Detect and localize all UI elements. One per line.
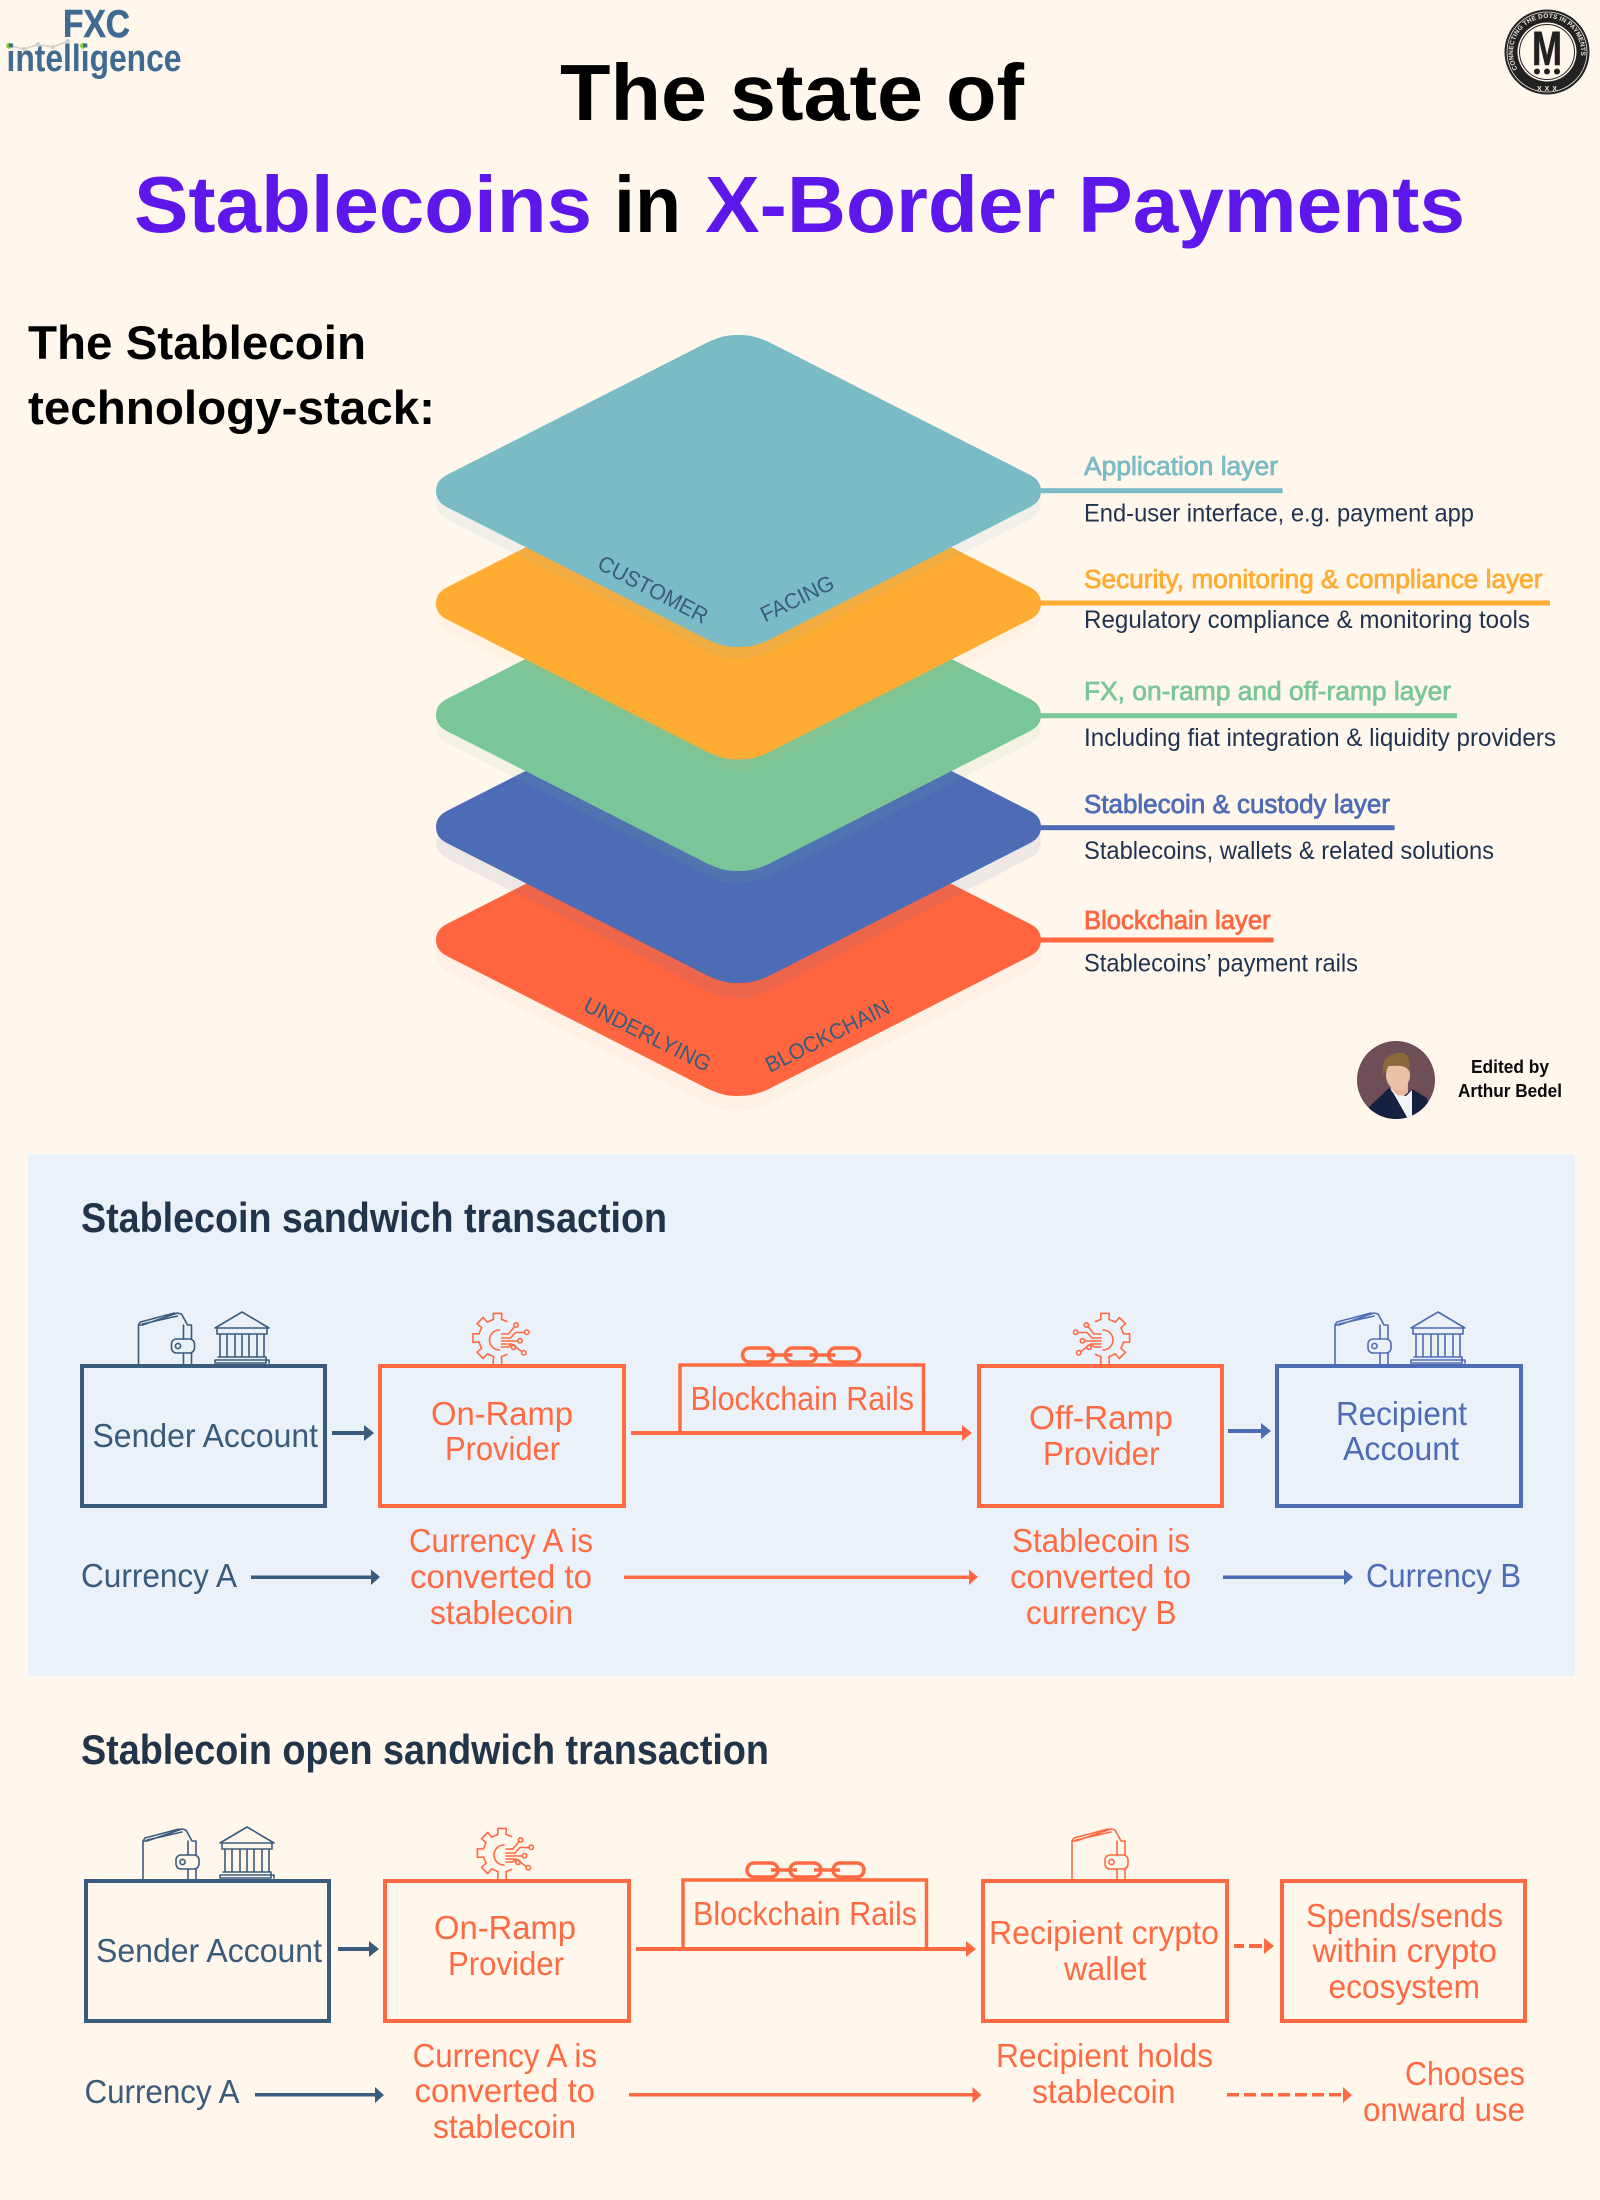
heading: The Stablecoin technology-stack: [28, 316, 435, 434]
layer: blockchain: BLOCKCHAIN: [761, 994, 894, 1077]
note: currency A is converted to stablecoin: [409, 1522, 593, 1631]
logo: FXC Intelligence: FXC: [63, 3, 130, 46]
logo: FXC Intelligence: intelligence: [6, 38, 182, 80]
badge: Connecting the dots in payments: XXX: [1537, 86, 1557, 93]
layer: security monitoring compliance: [436, 447, 1041, 772]
box: sender account: [82, 1366, 325, 1506]
box: off-ramp provider: Provider: [1043, 1435, 1160, 1472]
arrow: sender to on-ramp: [338, 1941, 379, 1957]
box: recipient crypto wallet: Recipient crypto: [989, 1914, 1219, 1951]
box: sender account: [86, 1881, 329, 2021]
title: in: [614, 160, 681, 249]
layer: blockchain: UNDERLYING: [580, 992, 715, 1077]
note: stablecoin is converted to currency B: Stablecoin is: [1012, 1522, 1190, 1559]
box: off-ramp provider: Off-Ramp: [1029, 1399, 1173, 1436]
layer: application: CUSTOMER: [594, 550, 712, 628]
arrow: sender to on-ramp: [332, 1425, 374, 1441]
arrow: currency A: [251, 1570, 380, 1585]
icon: sender bank: [215, 1312, 269, 1363]
note: currency A is converted to stablecoin: converted to: [415, 2072, 595, 2109]
layer: application: FACING: [756, 570, 838, 627]
box: blockchain rails with flow arrow: [631, 1365, 972, 1441]
layer label: stablecoin: Stablecoin & custody layer: [1084, 791, 1391, 819]
layer: FX on-ramp off-ramp: [436, 559, 1041, 883]
arrow: stablecoin flow: [629, 2087, 982, 2103]
layer label: security: [1040, 566, 1550, 634]
icon: sender wallet: [143, 1829, 199, 1880]
note: currency A is converted to stablecoin: [413, 2037, 597, 2145]
note: chooses onward use: onward use: [1363, 2091, 1525, 2128]
box: recipient crypto wallet: [983, 1881, 1227, 2021]
note: stablecoin is converted to currency B: currency B: [1026, 1594, 1176, 1631]
layer label: application: End-user interface, e.g. payment app: [1084, 500, 1474, 528]
arrow: off-ramp to recipient: [1228, 1423, 1271, 1439]
note: chooses onward use: Chooses: [1405, 2055, 1525, 2092]
icon: crypto wallet: [1072, 1829, 1128, 1880]
title: [134, 48, 1465, 249]
icon: chain: [747, 1863, 864, 1877]
heading: The Stablecoin technology-stack: technology-stack:: [28, 381, 435, 434]
box: on-ramp provider: [380, 1366, 624, 1506]
label: currency A: Currency A: [84, 2073, 240, 2110]
icon: recipient wallet: [1335, 1313, 1391, 1364]
badge: Connecting the dots in payments: CONNECTING THE DOTS IN PAYMENTS: [1508, 13, 1586, 70]
icon: sender bank: [220, 1827, 274, 1878]
icon: chain: [742, 1348, 860, 1362]
note: currency A is converted to stablecoin: converted to: [410, 1558, 592, 1595]
title: X-Border Payments: [705, 160, 1465, 249]
layer label: blockchain: [1040, 907, 1358, 978]
note: currency A is converted to stablecoin: stablecoin: [433, 2108, 576, 2145]
title: Stablecoins: [134, 160, 592, 249]
layer label: application: Application layer: [1084, 453, 1279, 481]
layer label: FX: [1040, 678, 1556, 752]
box: off-ramp provider: [979, 1366, 1222, 1506]
layer label: FX: Including fiat integration & liquidity providers: [1084, 724, 1556, 752]
box: on-ramp provider: Provider: [448, 1945, 564, 1982]
box: on-ramp provider: [385, 1881, 629, 2021]
heading: sandwich: Stablecoin sandwich transaction: [81, 1194, 667, 1241]
box: recipient account: Recipient: [1336, 1395, 1467, 1432]
arrow: dashed to spends: [1234, 1938, 1274, 1954]
edited by credit: Edited by: [1471, 1057, 1549, 1077]
box: on-ramp provider: Provider: [445, 1430, 560, 1467]
layer label: application: [1040, 453, 1474, 528]
note: currency A is converted to stablecoin: stablecoin: [430, 1594, 573, 1631]
box: spends and sends: [1282, 1881, 1525, 2021]
edited by credit: [1458, 1057, 1562, 1101]
box: spends and sends: Spends/sends: [1306, 1897, 1503, 1934]
layer label: stablecoin: Stablecoins, wallets & related solutions: [1084, 837, 1494, 865]
box: spends and sends: ecosystem: [1328, 1968, 1480, 2005]
edited by credit: Arthur Bedel: [1458, 1081, 1562, 1101]
box: blockchain rails with flow arrow: [636, 1880, 976, 1957]
box: spends and sends: within crypto: [1311, 1932, 1497, 1969]
note: currency A is converted to stablecoin: Currency A is: [409, 1522, 593, 1559]
layer label: security: Regulatory compliance & monitoring tools: [1084, 606, 1530, 634]
box: sender account: Sender Account: [96, 1932, 322, 1969]
note: stablecoin is converted to currency B: [1010, 1522, 1191, 1631]
arrow: currency B: [1223, 1570, 1353, 1585]
icon: sender wallet: [138, 1313, 194, 1364]
layer: blockchain: [436, 784, 1041, 1111]
logo: FXC Intelligence: [6, 3, 182, 80]
box: recipient account: Account: [1343, 1430, 1459, 1467]
arrow: dashed to onward use: [1227, 2087, 1352, 2103]
box: recipient crypto wallet: wallet: [1063, 1950, 1146, 1987]
note: recipient holds stablecoin: [996, 2037, 1213, 2110]
note: recipient holds stablecoin: Recipient holds: [996, 2037, 1213, 2074]
title: The state of: [560, 48, 1024, 137]
note: currency A is converted to stablecoin: Currency A is: [413, 2037, 597, 2074]
layer: application: [436, 335, 1041, 659]
icon: on-ramp gear: [477, 1828, 534, 1879]
badge: Connecting the dots in payments: [1504, 10, 1590, 94]
box: on-ramp provider: On-Ramp: [431, 1395, 573, 1432]
heading: The Stablecoin technology-stack: The Stablecoin: [28, 316, 366, 369]
box: on-ramp provider: On-Ramp: [434, 1909, 576, 1946]
heading: open sandwich: Stablecoin open sandwich transaction: [81, 1726, 769, 1773]
box: sender account: Sender Account: [92, 1417, 318, 1454]
editor portrait: [1357, 1041, 1435, 1119]
stack diagram: [436, 335, 1041, 1111]
arrow: stablecoin flow: [624, 1570, 978, 1585]
label: currency B: Currency B: [1366, 1557, 1521, 1594]
layer label: security: Security, monitoring & compliance layer: [1084, 566, 1543, 594]
icon: on-ramp gear: [473, 1313, 529, 1364]
layer label: blockchain: Stablecoins’ payment rails: [1084, 950, 1358, 978]
layer: stablecoin and custody: [436, 671, 1041, 998]
panel: stablecoin sandwich transaction: [28, 1154, 1575, 1676]
layer label: stablecoin: [1040, 791, 1494, 865]
layer label: blockchain: Blockchain layer: [1084, 907, 1271, 935]
icon: off-ramp gear: [1074, 1313, 1130, 1364]
layer label: FX: FX, on-ramp and off-ramp layer: [1084, 678, 1452, 706]
panel: stablecoin open sandwich transaction: [81, 1726, 1525, 2145]
box: blockchain rails with flow arrow: Blockchain Rails: [690, 1380, 914, 1417]
label: currency A: Currency A: [81, 1557, 237, 1594]
icon: recipient bank: [1411, 1312, 1465, 1363]
arrow: currency A: [255, 2087, 384, 2103]
badge: Connecting the dots in payments: M: [1532, 23, 1562, 76]
note: chooses onward use: [1363, 2055, 1525, 2128]
box: blockchain rails with flow arrow: Blockchain Rails: [693, 1895, 917, 1932]
box: recipient account: [1277, 1366, 1521, 1506]
note: stablecoin is converted to currency B: converted to: [1010, 1558, 1191, 1595]
note: recipient holds stablecoin: stablecoin: [1032, 2073, 1176, 2110]
